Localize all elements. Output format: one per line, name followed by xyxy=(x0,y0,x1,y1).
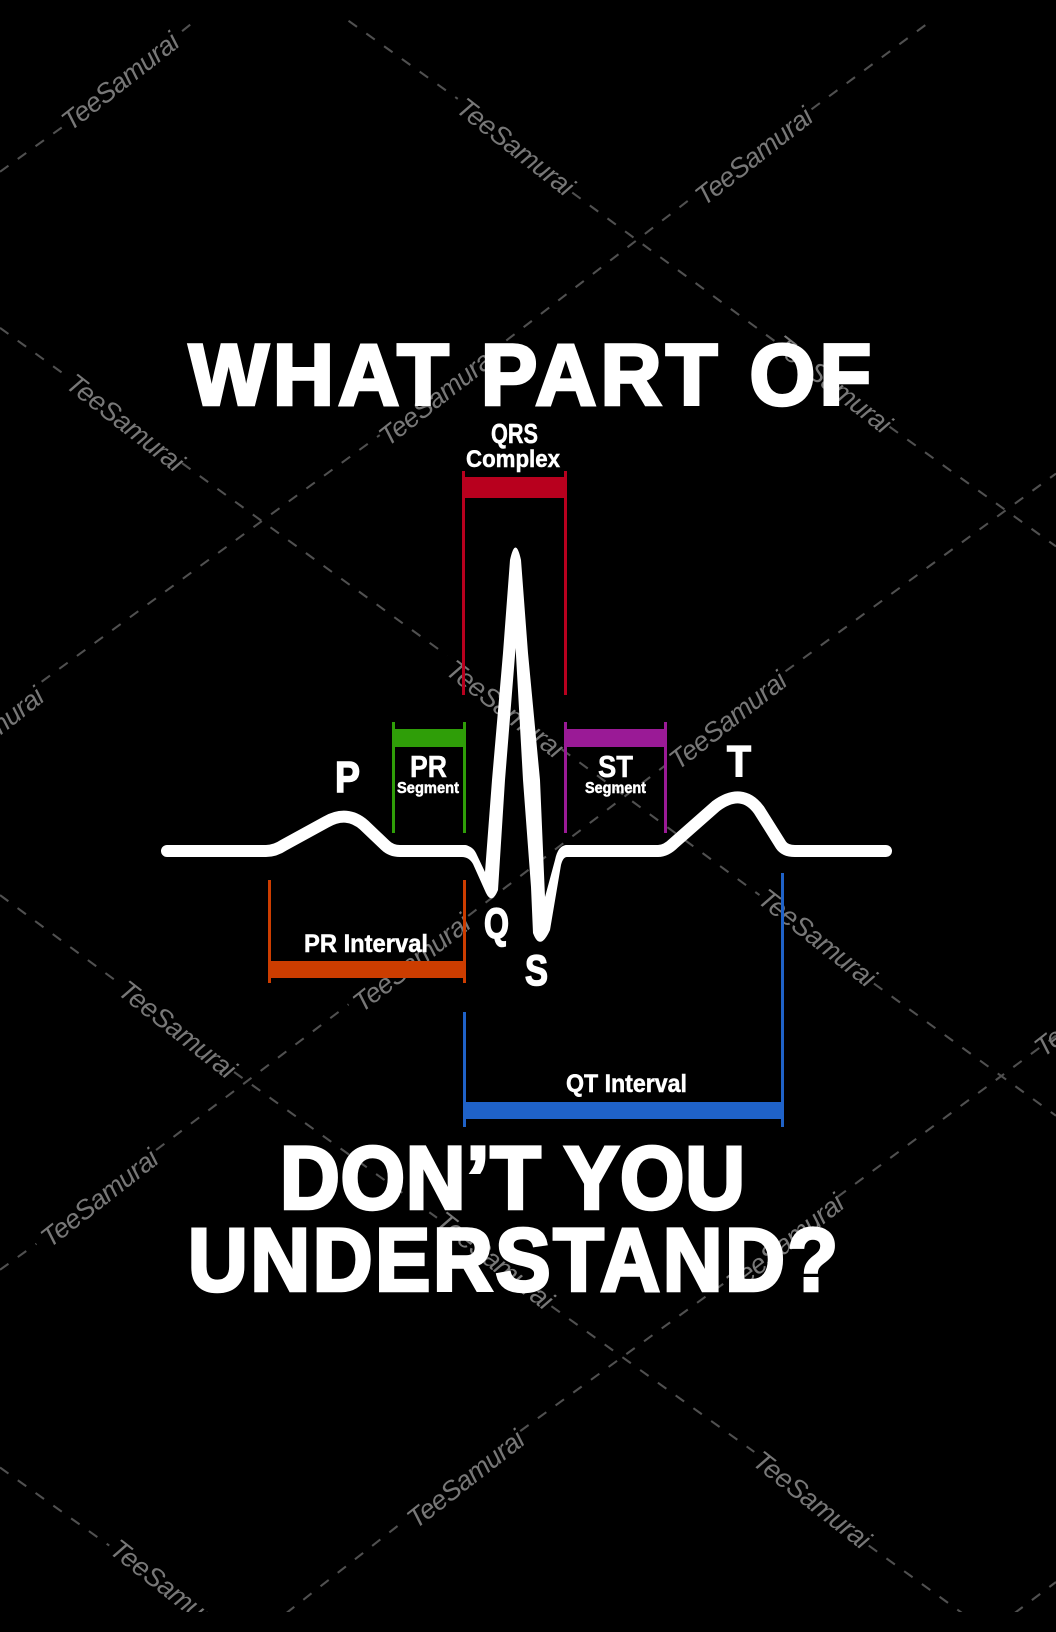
watermark pattern: TeeSamurai xyxy=(721,1187,851,1298)
QT interval label: QT Interval xyxy=(566,1070,687,1098)
watermark pattern: TeeSamurai xyxy=(689,101,819,211)
PR segment bracket xyxy=(392,722,466,833)
watermark pattern: TeeSamurai xyxy=(401,1423,531,1534)
ST segment label xyxy=(585,749,647,797)
PR interval bracket xyxy=(268,880,466,983)
watermark pattern: TeeSamurai xyxy=(747,1445,877,1556)
closing headline xyxy=(188,1129,838,1310)
QRS complex label xyxy=(466,418,561,473)
QT interval bracket xyxy=(463,873,784,1127)
watermark pattern: TeeSamurai xyxy=(61,368,191,478)
wave label Q: Q xyxy=(484,900,509,948)
QRS complex bracket xyxy=(462,471,567,695)
watermark pattern: TeeSamurai xyxy=(752,883,882,994)
wave label S: S xyxy=(525,947,548,995)
wave label P: P xyxy=(335,753,360,802)
watermark pattern: TeeSamurai xyxy=(56,26,186,136)
PR segment label xyxy=(397,749,460,797)
ST segment label: ST xyxy=(598,749,633,784)
watermark pattern: TeeSamurai xyxy=(768,329,898,440)
watermark pattern: TeeSamurai xyxy=(430,1206,560,1316)
closing headline: UNDERSTAND? xyxy=(188,1211,838,1310)
PR segment label: PR xyxy=(410,749,447,784)
ST segment label: Segment xyxy=(585,780,647,797)
watermark pattern: TeeSamurai xyxy=(373,341,503,452)
closing headline: DON’T YOU xyxy=(280,1129,745,1228)
watermark pattern: TeeSamurai xyxy=(440,654,570,765)
QRS complex label: Complex xyxy=(466,446,561,473)
ST segment bracket xyxy=(564,722,667,833)
ECG waveform xyxy=(167,548,886,942)
wave label T: T xyxy=(727,737,751,786)
watermark pattern: TeeSamurai xyxy=(35,1142,165,1253)
watermark pattern: TeeSamurai xyxy=(347,907,477,1018)
watermark pattern: TeeSamurai xyxy=(663,665,793,776)
PR segment label: Segment xyxy=(397,780,460,797)
watermark pattern: TeeSamurai xyxy=(451,92,581,203)
QRS complex label: QRS xyxy=(491,418,538,449)
watermark pattern: TeeSamurai xyxy=(113,974,243,1085)
title: what part of: WHAT PART OF xyxy=(189,328,871,424)
PR interval label: PR Interval xyxy=(304,930,428,958)
